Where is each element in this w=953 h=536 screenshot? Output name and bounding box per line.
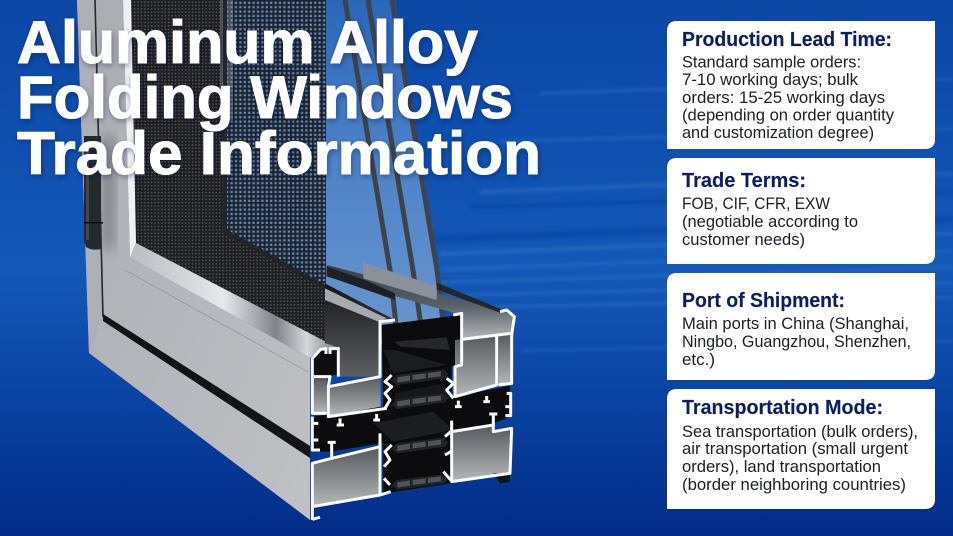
panel: production lead time: Production Lead Time: [682,29,892,51]
panel: production lead time: Standard sample orders: [682,54,861,72]
panel: production lead time [667,21,935,149]
panel: port of shipment: Port of Shipment: [682,290,845,312]
three glass panes [345,0,445,343]
panel: transportation mode [667,389,935,509]
glass pane background [326,0,447,345]
panel: transportation mode: (border neighboring countries) [682,476,906,494]
panel: trade terms: customer needs) [682,231,805,249]
hollow chambers [312,333,512,507]
hinge [84,136,114,250]
panel: transportation mode: orders), land transportation [682,458,881,476]
aluminum profile cross-section [312,263,514,520]
panel: production lead time: and customization degree) [682,124,874,142]
panel: trade terms: Trade Terms: [682,170,806,192]
panel: port of shipment: Main ports in China (Shanghai, [682,315,909,333]
panel: transportation mode: Sea transportation (bulk orders), [682,423,918,441]
panel: trade terms [667,158,935,264]
window frame with mesh and triple glazing [77,0,447,520]
panel: production lead time: (depending on order quantity [682,107,895,125]
aluminum frame front face [77,0,310,520]
title: Trade Information [17,120,541,187]
title: Folding Windows [17,64,513,131]
thermal break strips [392,369,448,490]
title [17,9,541,187]
panel: trade terms: FOB, CIF, CFR, EXW [682,195,831,213]
dark central chamber [382,315,460,493]
insect screen mesh [131,0,326,345]
panel: trade terms: (negotiable according to [682,213,858,231]
panel: production lead time: orders: 15-25 working days [682,89,885,107]
left inner wall [325,283,395,377]
white cut edges [312,310,514,520]
panel: transportation mode: Transportation Mode: [682,397,883,419]
panel: port of shipment: etc.) [682,351,715,369]
title: Aluminum Alloy [17,9,479,76]
middle black band [313,386,510,452]
rear rail [327,265,513,339]
panel: transportation mode: air transportation (small urgent [682,440,908,458]
panel: production lead time: 7-10 working days; bulk [682,71,859,89]
panel: port of shipment [667,273,935,380]
panel: port of shipment: Ningbo, Guangzhou, Shenzhen, [682,333,911,351]
